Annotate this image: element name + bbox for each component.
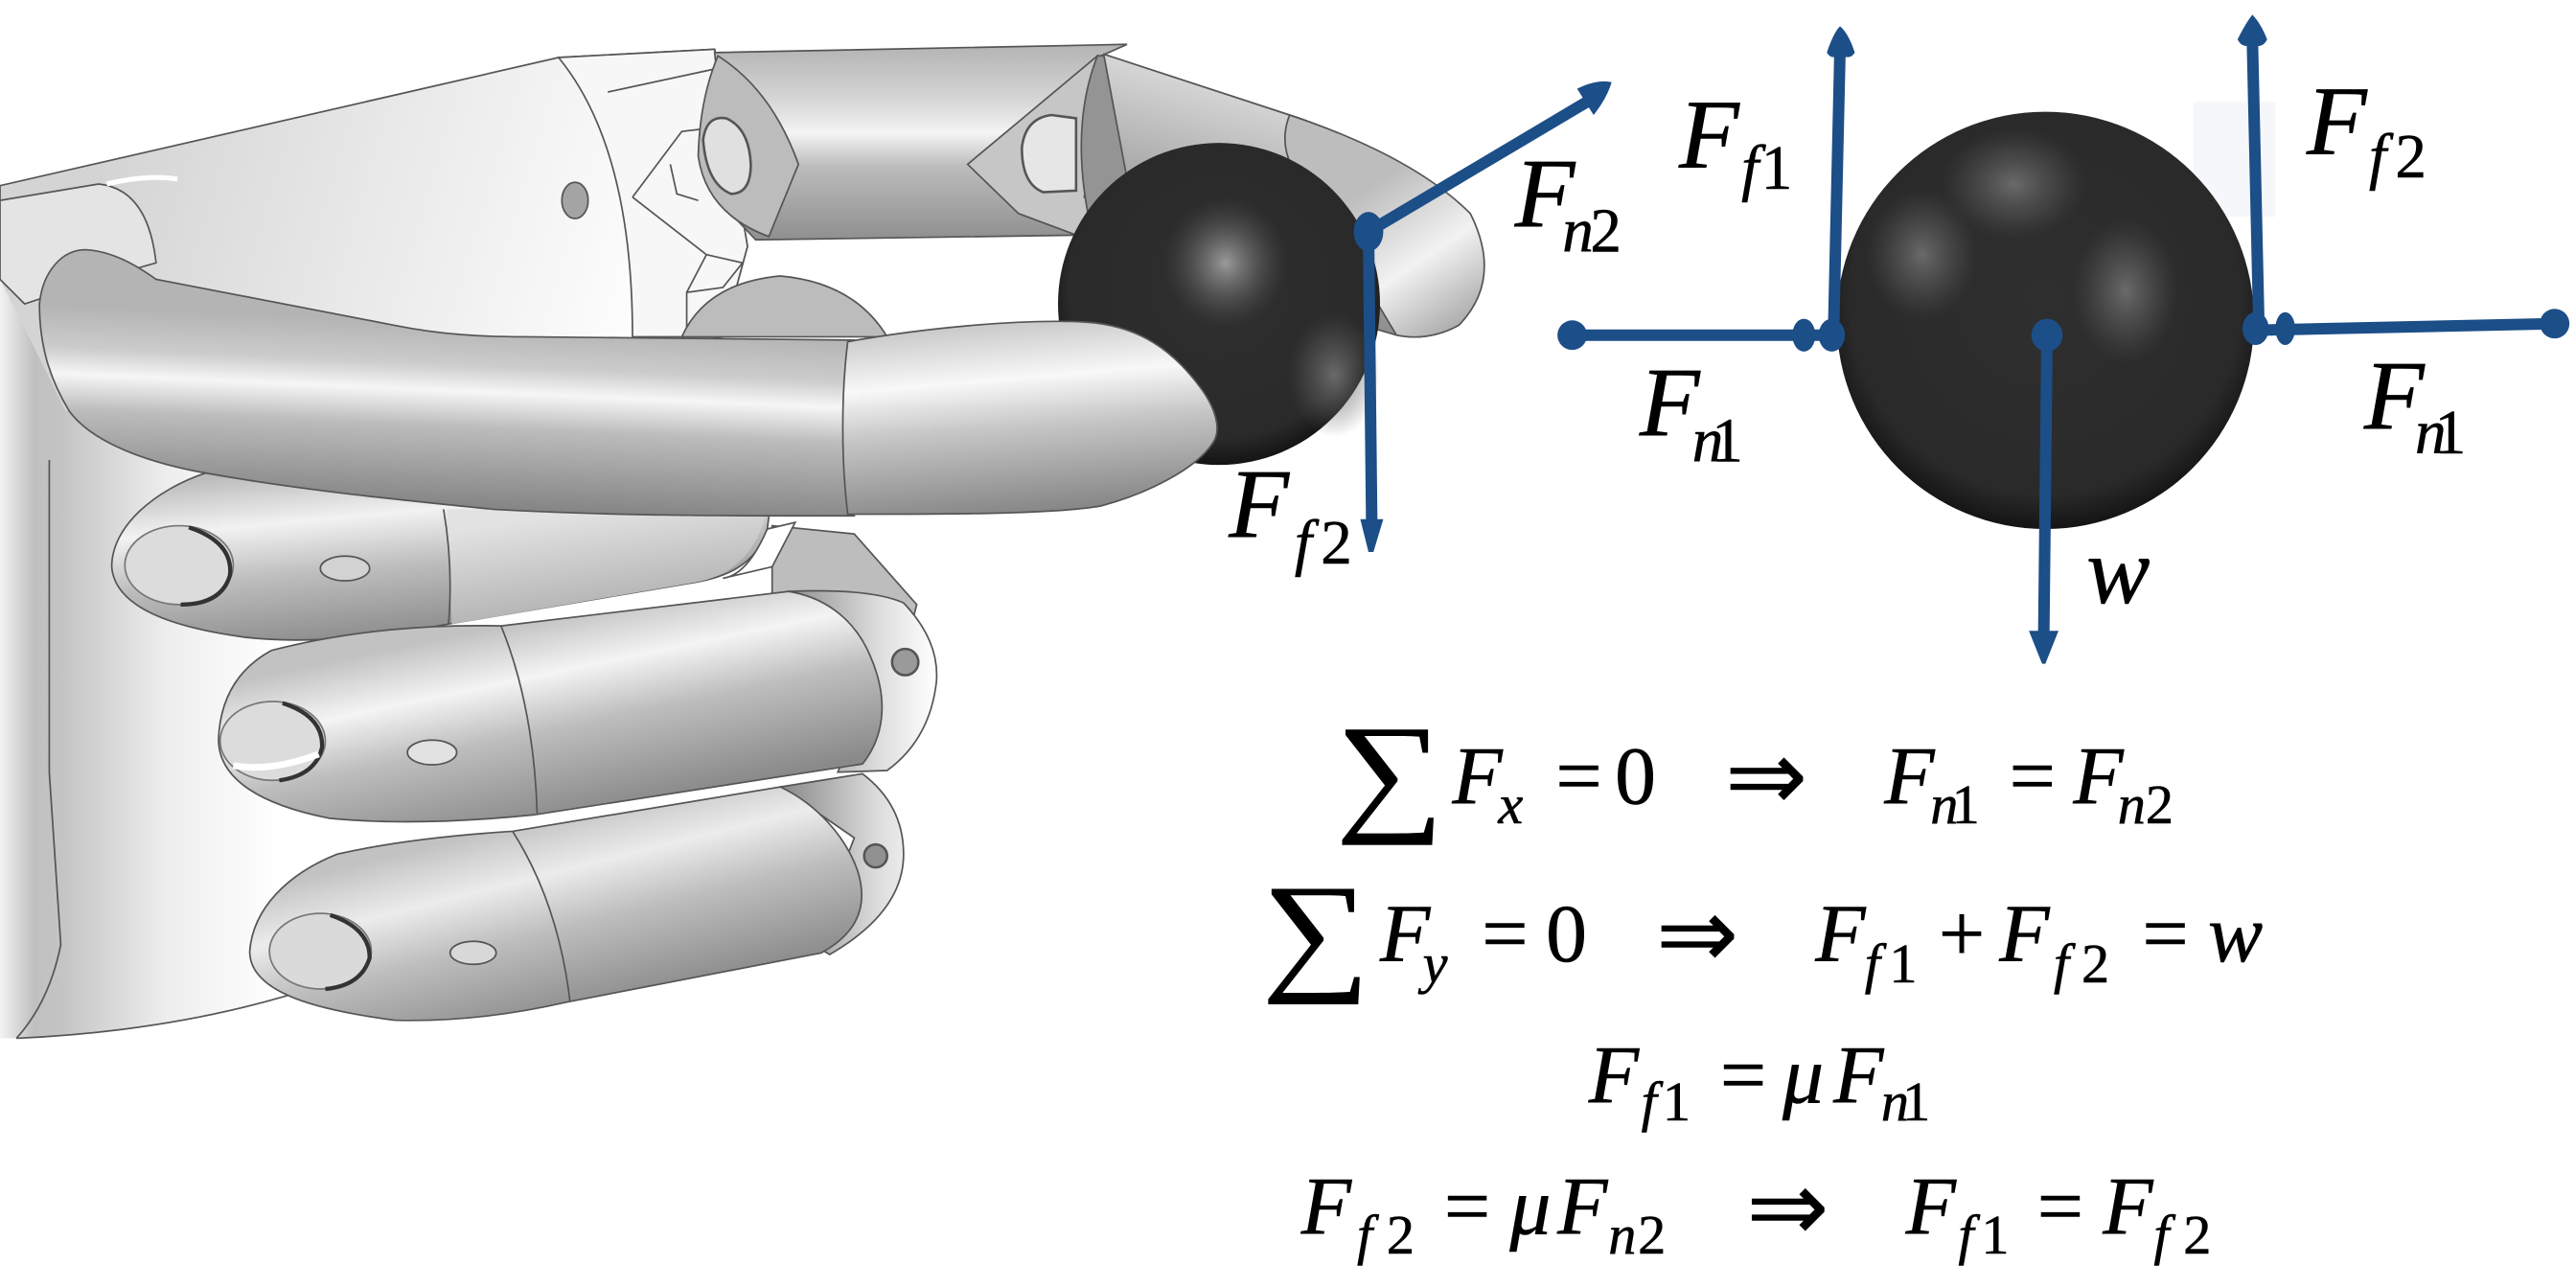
free body ball (1837, 102, 2275, 529)
seam three (513, 831, 570, 1002)
label Fn2: n (1562, 196, 1594, 265)
nail three (269, 913, 371, 989)
force balance y: F (1379, 888, 1432, 979)
equation 4: 2 (1387, 1204, 1414, 1266)
force balance x: F (2072, 730, 2125, 821)
force balance y: = (2142, 888, 2189, 979)
equation 4: 2 (1638, 1204, 1666, 1266)
force balance y: f (1865, 932, 1887, 995)
joint shadow (1081, 56, 1134, 235)
right joint diamond (968, 56, 1097, 235)
fingertip end cap (1285, 115, 1484, 337)
force balance x: = (1555, 730, 1602, 821)
label Ff2: F (2306, 67, 2368, 176)
label Ff2 on hand: f (1295, 509, 1320, 578)
sensor three (450, 941, 496, 964)
left joint lug (699, 56, 798, 237)
arrow Fn1 right (2242, 309, 2569, 345)
force balance x: F (1883, 730, 1936, 821)
force balance x: n (2118, 773, 2146, 836)
seam two (501, 626, 538, 815)
ball body (1837, 112, 2254, 529)
thumb tip (842, 321, 1217, 515)
equation 3: μ (1782, 1029, 1824, 1120)
force balance x: ⇒ (1725, 723, 1807, 832)
ball body (1058, 143, 1380, 465)
label Fn1 left: F (1639, 348, 1701, 457)
label Ff1: 1 (1761, 134, 1792, 203)
equation 4: 1 (1981, 1204, 2010, 1266)
equation 4: f (1958, 1204, 1980, 1266)
sigma y: ∑ (1262, 859, 1369, 1005)
arrow w (2029, 319, 2062, 664)
free body arrows (1557, 14, 2569, 664)
equation 3: F (1832, 1029, 1885, 1120)
robotic hand (0, 44, 1484, 1038)
highlight left (1866, 189, 1978, 320)
arrow Ff1 (1827, 26, 1854, 338)
force balance y: F (1998, 888, 2051, 979)
force balance y: ⇒ (1656, 881, 1738, 990)
equation 3: F (1588, 1029, 1641, 1120)
equation 4: 2 (2183, 1204, 2211, 1266)
highlight top (1942, 128, 2086, 240)
label Fn1 right: F (2363, 341, 2426, 450)
equation 1 (1336, 700, 2174, 846)
label Ff2: f (2369, 123, 2394, 192)
sensor one (320, 556, 370, 581)
equation 4: f (1357, 1204, 1379, 1266)
label Fn1 right: 1 (2435, 399, 2466, 468)
equation 4: μ (1508, 1161, 1551, 1252)
thenar bump (681, 276, 887, 336)
mechanical panel (559, 49, 748, 336)
halo (2194, 102, 2275, 217)
equation 4: F (1905, 1161, 1958, 1252)
back of hand (0, 49, 748, 493)
palm edge line (16, 460, 288, 1038)
label Fn1 right: n (2415, 399, 2447, 468)
equation 3: f (1642, 1070, 1664, 1133)
equation 4: n (1608, 1204, 1636, 1266)
equation 4: = (2037, 1161, 2083, 1252)
arrow Fn2 (1368, 81, 1612, 232)
thumb (39, 250, 854, 516)
sensor two (407, 740, 457, 765)
arrow Ff2 left (1360, 232, 1383, 552)
upper fingertip (1084, 55, 1482, 337)
force balance y: w (2208, 888, 2263, 979)
hole three (864, 844, 887, 867)
label Fn2: 2 (1590, 196, 1622, 265)
force arrows on hand (1354, 81, 1612, 552)
force balance y: 1 (1889, 932, 1918, 995)
third knuckle cap (780, 773, 904, 954)
equation 4: F (1300, 1161, 1353, 1252)
ball lower highlight (1288, 312, 1380, 437)
equation 4: f (2153, 1204, 2175, 1266)
left lug hole (703, 118, 750, 194)
second knuckle cap (789, 591, 936, 772)
force balance y: F (1814, 888, 1867, 979)
lower finger two (218, 591, 882, 821)
back hole (562, 182, 588, 218)
label Ff2: 2 (2395, 123, 2426, 192)
force balance x: F (1451, 730, 1504, 821)
seam one (444, 509, 450, 624)
label Ff2 on hand: F (1228, 450, 1290, 560)
white gap (723, 522, 795, 578)
base knuckle (0, 184, 156, 304)
panel linkage (608, 69, 743, 329)
lower finger one (112, 444, 772, 640)
force balance y: + (1939, 888, 1985, 979)
equation 4: ⇒ (1746, 1153, 1828, 1262)
equation 3: 1 (1902, 1070, 1930, 1133)
sigma x: ∑ (1336, 700, 1444, 846)
equation 4: F (1556, 1161, 1609, 1252)
knuckle highlight (106, 177, 177, 184)
label Fn2: F (1514, 140, 1576, 249)
label Fn1 left: n (1692, 407, 1723, 476)
force balance y: = (1482, 888, 1529, 979)
equation 3: n (1881, 1070, 1909, 1133)
force balance y: y (1418, 932, 1448, 995)
lower finger three (250, 787, 862, 1021)
contact dot (1354, 212, 1383, 251)
arrow Fn1 left (1557, 319, 1845, 352)
label Ff1: f (1741, 134, 1766, 203)
third finger linkage (772, 526, 917, 690)
force balance y: 2 (2082, 932, 2109, 995)
label w: w (2086, 518, 2150, 624)
highlight right (2073, 218, 2178, 363)
hole two (892, 649, 918, 676)
force balance x: n (1930, 773, 1958, 836)
equation 3: = (1720, 1029, 1766, 1120)
nail one (125, 526, 233, 605)
right lug hole (1022, 115, 1076, 193)
force balance y: f (2054, 932, 2076, 995)
equation 2 (1262, 859, 2263, 1005)
force balance y: 0 (1546, 888, 1587, 979)
label Ff1: F (1678, 80, 1740, 190)
force balance x: = (2010, 730, 2056, 821)
nail two (220, 702, 325, 780)
lower finger one base (447, 509, 768, 624)
force balance x: 2 (2146, 773, 2174, 836)
label Ff2 on hand: 2 (1321, 509, 1352, 578)
force balance x: x (1497, 773, 1523, 836)
palm (0, 279, 789, 1038)
equation 4: F (2102, 1161, 2154, 1252)
label Fn1 left: 1 (1712, 407, 1743, 476)
arrow Ff2 right (2238, 14, 2267, 329)
ball highlight (1163, 197, 1288, 329)
equation 4: = (1444, 1161, 1490, 1252)
force balance x: 1 (1952, 773, 1980, 836)
equation 3: 1 (1663, 1070, 1690, 1133)
held ball (1058, 143, 1380, 465)
force balance x: 0 (1615, 730, 1656, 821)
upper finger proximal (715, 44, 1127, 240)
